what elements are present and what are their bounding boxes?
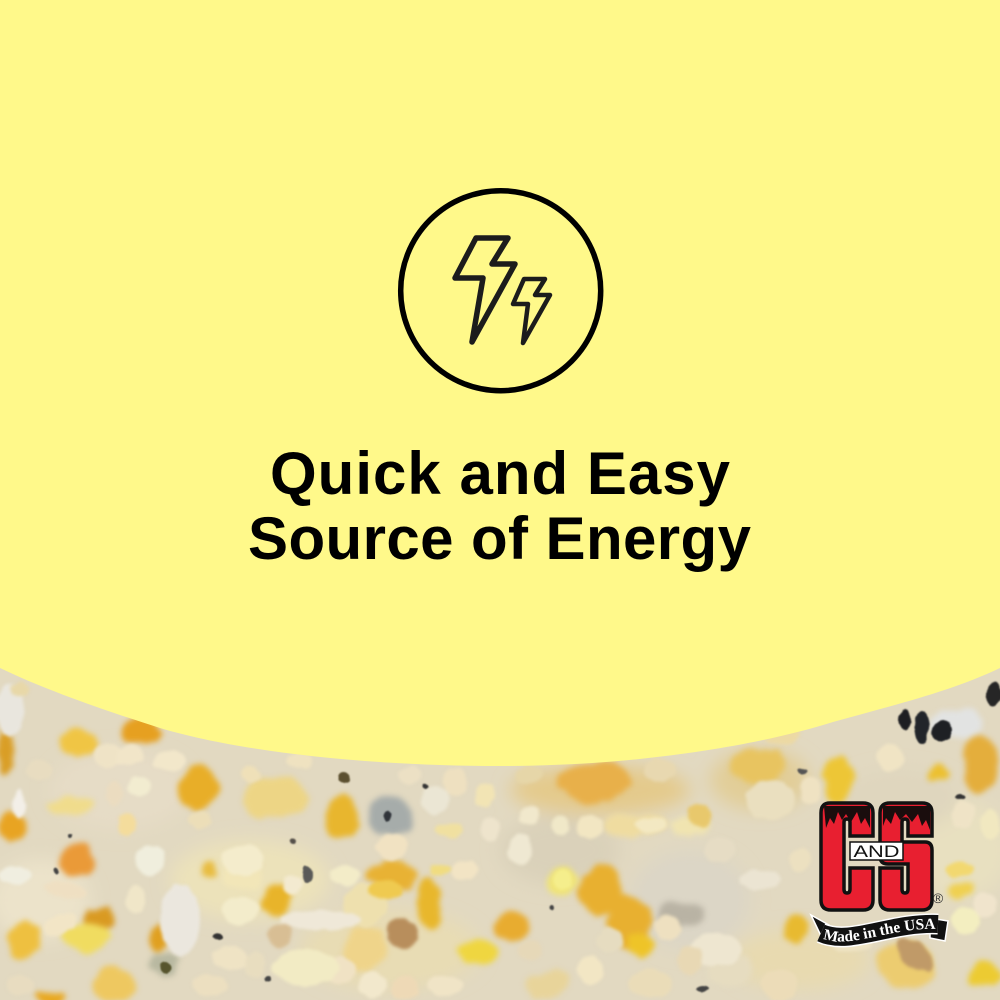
logo banner: Made in the USA [823,918,936,942]
logo letter S [880,803,932,910]
logo registered mark: ® [933,890,944,906]
title: Quick and Easy [270,440,731,507]
yellow curved panel [0,0,1000,766]
icon: large lightning bolt [455,238,515,342]
logo: C and S Made in the USA [810,801,949,948]
title [248,440,752,572]
background: birdseed suet texture [0,650,1000,1000]
icon: lightning bolts in circle [401,191,601,391]
title: Source of Energy [248,505,752,572]
icon: small lightning bolt [513,279,550,343]
logo letter C [821,803,873,910]
logo AND box [850,842,903,861]
logo burnt tops [824,806,930,830]
logo AND box: AND [854,842,900,861]
